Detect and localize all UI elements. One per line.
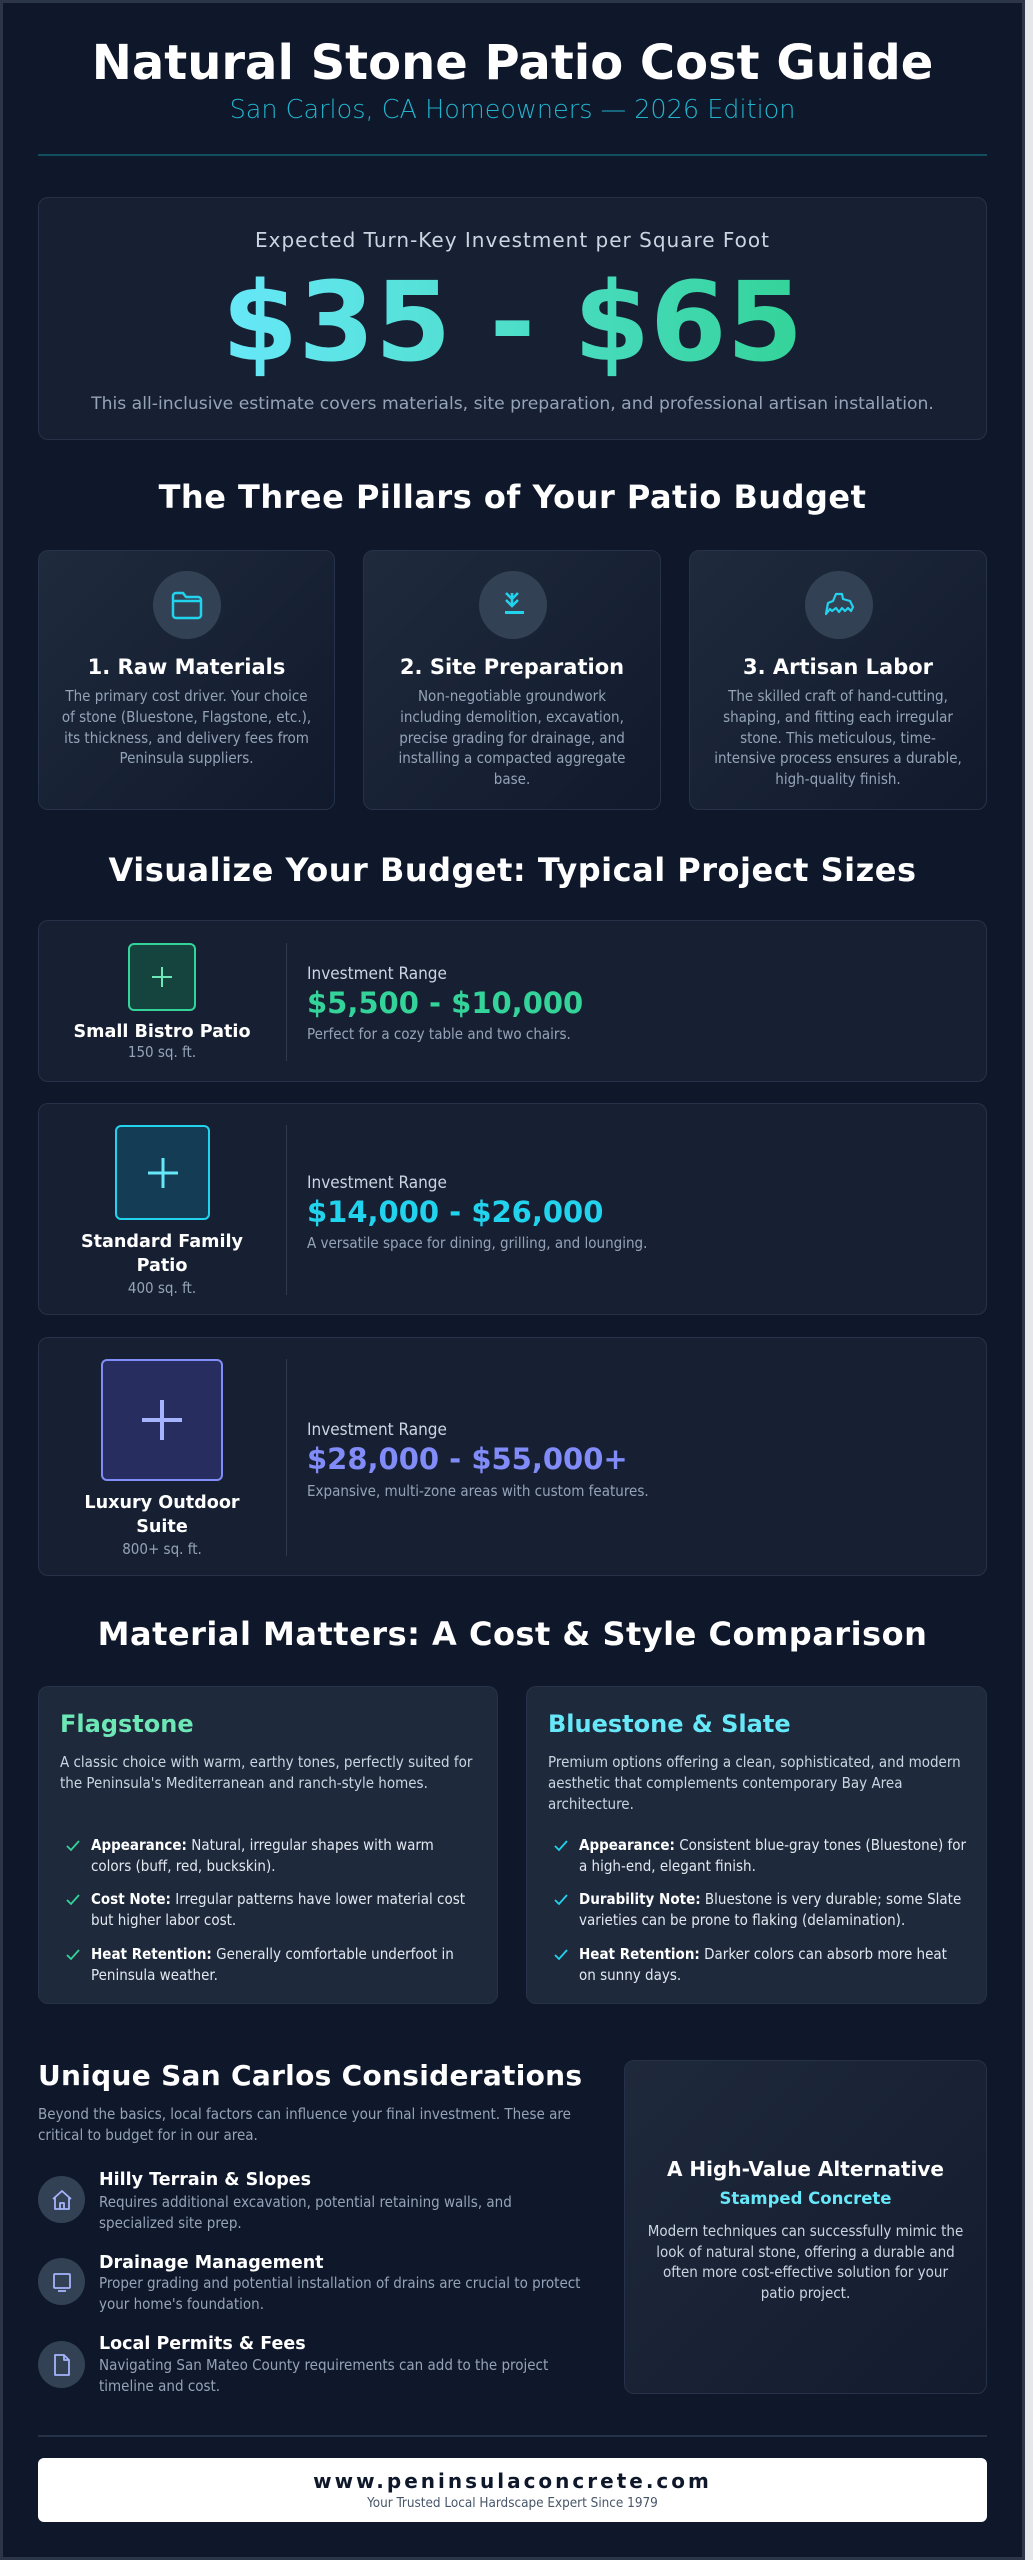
hero card: price per square foot — [38, 197, 987, 440]
list: flagstone features — [66, 1836, 465, 1984]
panel: luxury outdoor suite: 800+ sq. ft. — [122, 1540, 202, 1558]
panel: raw materials: The primary cost driver. Your choice of stone (Bluestone, Flagstone, etc.), its thickness, and delivery fees from Peninsula suppliers. — [62, 687, 311, 767]
item: hilly terrain: Hilly Terrain & Slopes — [99, 2170, 311, 2190]
item: permits — [38, 2334, 548, 2395]
footer: website banner: www.peninsulaconcrete.com — [313, 2469, 712, 2493]
hero description: This all-inclusive estimate covers materials, site preparation, and professional artisan installation. — [91, 394, 934, 414]
heading: material comparison: Material Matters: A Cost & Style Comparison — [98, 1615, 927, 1653]
panel: luxury outdoor suite: Investment Range — [307, 1420, 447, 1440]
list: bluestone features: Appearance: Consistent blue-gray tones (Bluestone) for a high-end, elegant finish. — [579, 1836, 966, 1874]
icon: medium square — [115, 1125, 210, 1220]
panel: luxury outdoor suite: $28,000 - $55,000+ — [307, 1442, 628, 1476]
panel: raw materials: 1. Raw Materials — [88, 655, 285, 679]
callout: stamped concrete alternative: Stamped Concrete — [719, 2189, 892, 2208]
heading: project sizes: Visualize Your Budget: Typical Project Sizes — [109, 851, 916, 889]
icon: small square — [128, 943, 196, 1011]
footer: website banner: Your Trusted Local Hardscape Expert Since 1979 — [367, 2496, 658, 2511]
item: drainage — [38, 2253, 580, 2313]
item: hilly terrain — [38, 2170, 512, 2232]
panel: site preparation: 2. Site Preparation — [400, 655, 624, 679]
icon: document — [38, 2341, 85, 2388]
heading: three pillars: The Three Pillars of Your Patio Budget — [159, 478, 866, 516]
item: drainage: Drainage Management — [99, 2253, 324, 2273]
panel: artisan labor: The skilled craft of hand-cutting, shaping, and fitting each irregular stone. This meticulous, time-intensive process ensures a durable, high-quality finish. — [714, 687, 962, 788]
title: Natural Stone Patio Cost Guide — [92, 35, 933, 91]
panel: flagstone — [38, 1686, 498, 2004]
icon: large square — [101, 1359, 223, 1481]
footer: website banner — [38, 2458, 987, 2522]
panel: small bistro patio: Investment Range — [307, 964, 447, 984]
panel: small bistro patio: Small Bistro Patio — [73, 1022, 251, 1042]
item: permits: Local Permits & Fees — [99, 2334, 306, 2354]
panel: artisan labor — [689, 550, 987, 810]
panel: luxury outdoor suite: Expansive, multi-zone areas with custom features. — [307, 1482, 649, 1500]
icon: monitor — [38, 2258, 85, 2305]
panel: standard family patio: A versatile space for dining, grilling, and lounging. — [307, 1234, 647, 1252]
item: drainage: Proper grading and potential installation of drains are crucial to protect your home's foundation. — [99, 2274, 580, 2313]
panel: standard family patio: $14,000 - $26,000 — [307, 1195, 603, 1229]
panel: standard family patio: Standard Family Patio — [81, 1232, 243, 1276]
list: bluestone features: Durability Note: Bluestone is very durable; some Slate varieties can be prone to flaking (delamination). — [579, 1890, 961, 1928]
panel: small bistro patio: $5,500 - $10,000 — [307, 986, 583, 1020]
hero label: Expected Turn-Key Investment per Square Foot — [255, 228, 770, 252]
icon: hand — [805, 571, 873, 639]
list: flagstone features: Appearance: Natural, irregular shapes with warm colors (buff, red, buckskin). — [91, 1836, 434, 1874]
panel: small bistro patio: Perfect for a cozy table and two chairs. — [307, 1025, 571, 1043]
panel: bluestone & slate — [526, 1686, 987, 2004]
list: bluestone features: Heat Retention: Darker colors can absorb more heat on sunny days. — [579, 1945, 947, 1984]
subtitle: San Carlos, CA Homeowners — 2026 Edition — [230, 95, 795, 125]
list: bluestone features — [554, 1836, 966, 1984]
panel: site preparation: Non-negotiable groundwork including demolition, excavation, precise grading for drainage, and installing a compacted aggregate base. — [398, 687, 626, 788]
text: considerations intro: Beyond the basics, local factors can influence your final investment. These are critical to budget for in our area. — [38, 2105, 571, 2144]
item: permits: Navigating San Mateo County requirements can add to the project timeline and cost. — [99, 2356, 548, 2395]
panel: site preparation — [363, 550, 661, 810]
panel: raw materials — [38, 550, 335, 810]
panel: flagstone: Flagstone — [60, 1710, 194, 1738]
panel: standard family patio: Investment Range — [307, 1173, 447, 1193]
list: flagstone features: Cost Note: Irregular patterns have lower material cost but higher labor cost. — [91, 1890, 465, 1928]
panel: standard family patio — [38, 1103, 987, 1315]
callout: stamped concrete alternative — [624, 2060, 987, 2394]
panel: bluestone & slate: Bluestone & Slate — [548, 1710, 791, 1738]
hero price: $35 - $65 — [222, 258, 803, 386]
item: hilly terrain: Requires additional excavation, potential retaining walls, and specialized site prep. — [99, 2193, 512, 2232]
callout: stamped concrete alternative: Modern techniques can successfully mimic the look of natural stone, offering a durable and often more cost-effective solution for your patio project. — [648, 2222, 963, 2302]
list: flagstone features: Heat Retention: Generally comfortable underfoot in Peninsula weather. — [91, 1945, 454, 1984]
panel: standard family patio: 400 sq. ft. — [128, 1279, 196, 1297]
panel: small bistro patio — [38, 920, 987, 1082]
panel: luxury outdoor suite — [38, 1337, 987, 1576]
icon: folder — [153, 571, 221, 639]
panel: small bistro patio: 150 sq. ft. — [128, 1043, 196, 1061]
panel: bluestone & slate: Premium options offering a clean, sophisticated, and modern aesthetic that complements contemporary Bay Area architecture. — [548, 1753, 961, 1813]
heading: san carlos considerations: Unique San Carlos Considerations — [38, 2059, 582, 2092]
panel: luxury outdoor suite: Luxury Outdoor Suite — [84, 1493, 240, 1537]
icon: house — [38, 2176, 85, 2223]
panel: flagstone: A classic choice with warm, earthy tones, perfectly suited for the Peninsula's Mediterranean and ranch-style homes. — [60, 1753, 472, 1792]
callout: stamped concrete alternative: A High-Value Alternative — [667, 2157, 944, 2181]
icon: dig down — [479, 571, 547, 639]
panel: artisan labor: 3. Artisan Labor — [743, 655, 933, 679]
